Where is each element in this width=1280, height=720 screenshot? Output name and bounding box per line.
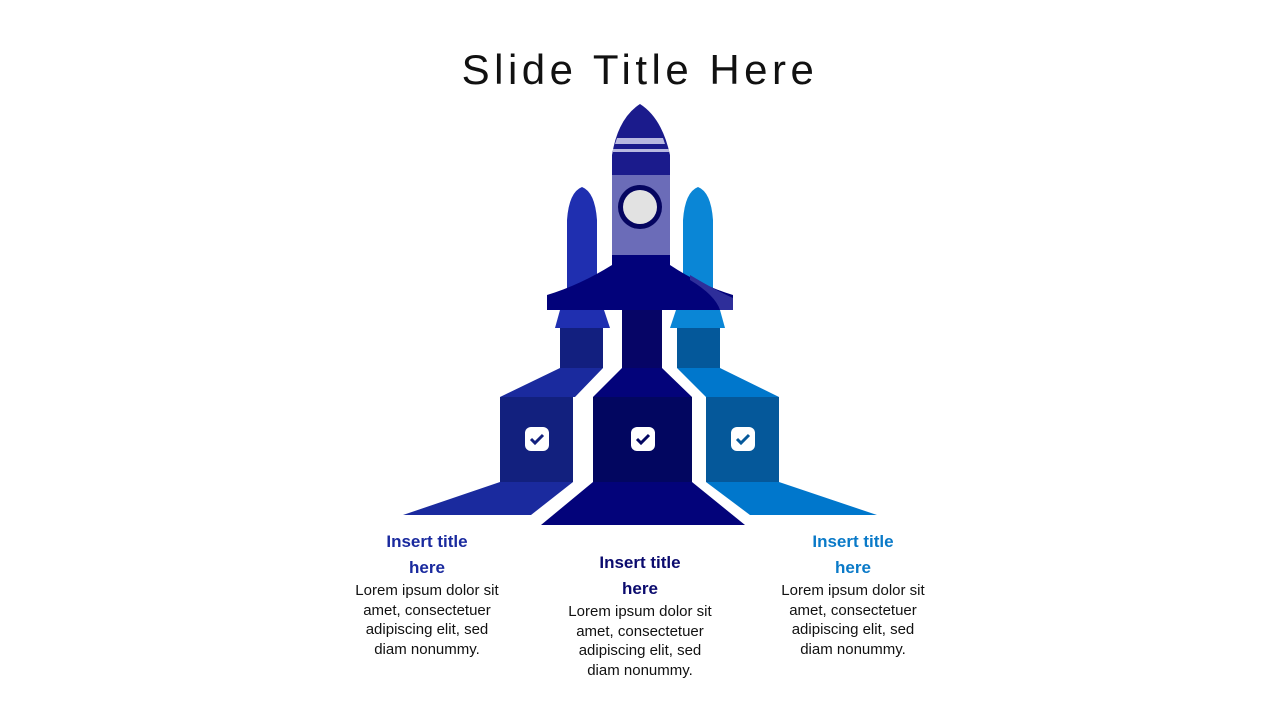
right booster <box>670 187 725 328</box>
text block: left <box>355 532 499 658</box>
text block: left: here <box>409 558 445 577</box>
text block: center: diam nonummy. <box>587 662 693 678</box>
text block: left: Lorem ipsum dolor sit <box>355 582 499 599</box>
icon: check right <box>731 427 755 451</box>
text block: center: adipiscing elit, sed <box>579 642 701 659</box>
text block: center: here <box>622 579 658 598</box>
panel: center path <box>541 310 745 525</box>
text block: left: adipiscing elit, sed <box>366 621 488 638</box>
text block: right <box>781 532 925 658</box>
title: Slide Title Here <box>462 46 818 93</box>
text block: center: Lorem ipsum dolor sit <box>568 603 712 620</box>
text block: right: amet, consectetuer <box>789 602 917 618</box>
text block: left: diam nonummy. <box>374 640 480 658</box>
icon: check center <box>631 427 655 451</box>
main rocket body <box>547 104 733 310</box>
text block: right: adipiscing elit, sed <box>792 621 914 638</box>
icon: window <box>618 185 662 229</box>
text block: left: Insert title <box>386 532 468 551</box>
text block: center: Insert title <box>599 553 681 572</box>
text block: center <box>568 553 712 678</box>
text block: right: diam nonummy. <box>800 640 906 658</box>
text block: right: Insert title <box>812 532 894 551</box>
text block: right: here <box>835 558 871 577</box>
icon: check left <box>525 427 549 451</box>
text block: right: Lorem ipsum dolor sit <box>781 582 925 599</box>
text block: center: amet, consectetuer <box>576 622 704 640</box>
panel: left path <box>403 328 603 515</box>
text block: left: amet, consectetuer <box>363 602 491 618</box>
left booster <box>555 187 610 328</box>
panel: right path <box>677 328 877 515</box>
